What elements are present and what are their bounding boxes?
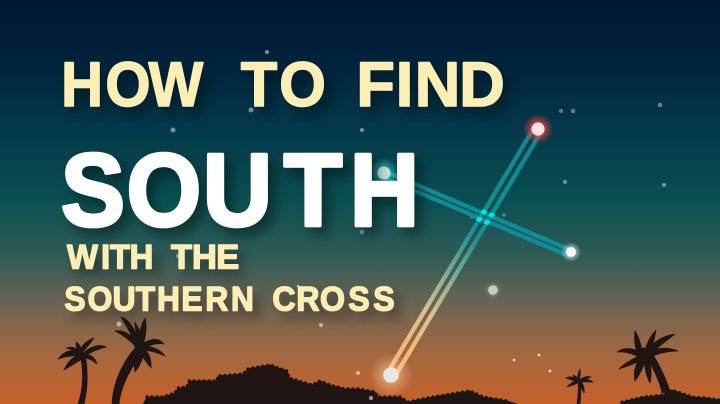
subheading: southern cross: CROSS — [272, 280, 395, 319]
star: red top — [523, 114, 553, 144]
palm: tall left — [112, 317, 165, 404]
star: right — [561, 242, 581, 262]
palm: small right — [566, 369, 593, 404]
palm: large right — [617, 330, 678, 393]
hill: right — [620, 390, 720, 404]
star: left — [369, 158, 399, 188]
silhouette: hills and palms — [58, 317, 720, 404]
cross bar: double line — [382, 170, 572, 257]
subheading: southern cross — [64, 280, 395, 319]
foreground star on hill — [369, 396, 373, 400]
long axis: double line — [388, 127, 542, 377]
hill: centre — [143, 365, 517, 404]
southern cross constellation — [369, 114, 581, 397]
heading: how to find: FIND — [356, 50, 505, 120]
background stars — [117, 50, 666, 375]
star: free-standing — [484, 281, 502, 299]
heading: how to find: HOW — [61, 49, 204, 120]
heading: how to find: TO — [241, 50, 326, 121]
heading: how to find — [61, 49, 505, 121]
star: bottom — [369, 353, 413, 397]
subheading: with the — [67, 238, 239, 277]
heading: south: SOUTH — [61, 133, 419, 248]
subheading: with the: THE — [171, 238, 239, 276]
crossing highlights — [476, 209, 495, 225]
subheading: southern cross: SOUTHERN — [64, 280, 254, 319]
title text — [61, 49, 505, 319]
subheading: with the: WITH — [67, 239, 153, 277]
palm: far left — [58, 338, 106, 404]
